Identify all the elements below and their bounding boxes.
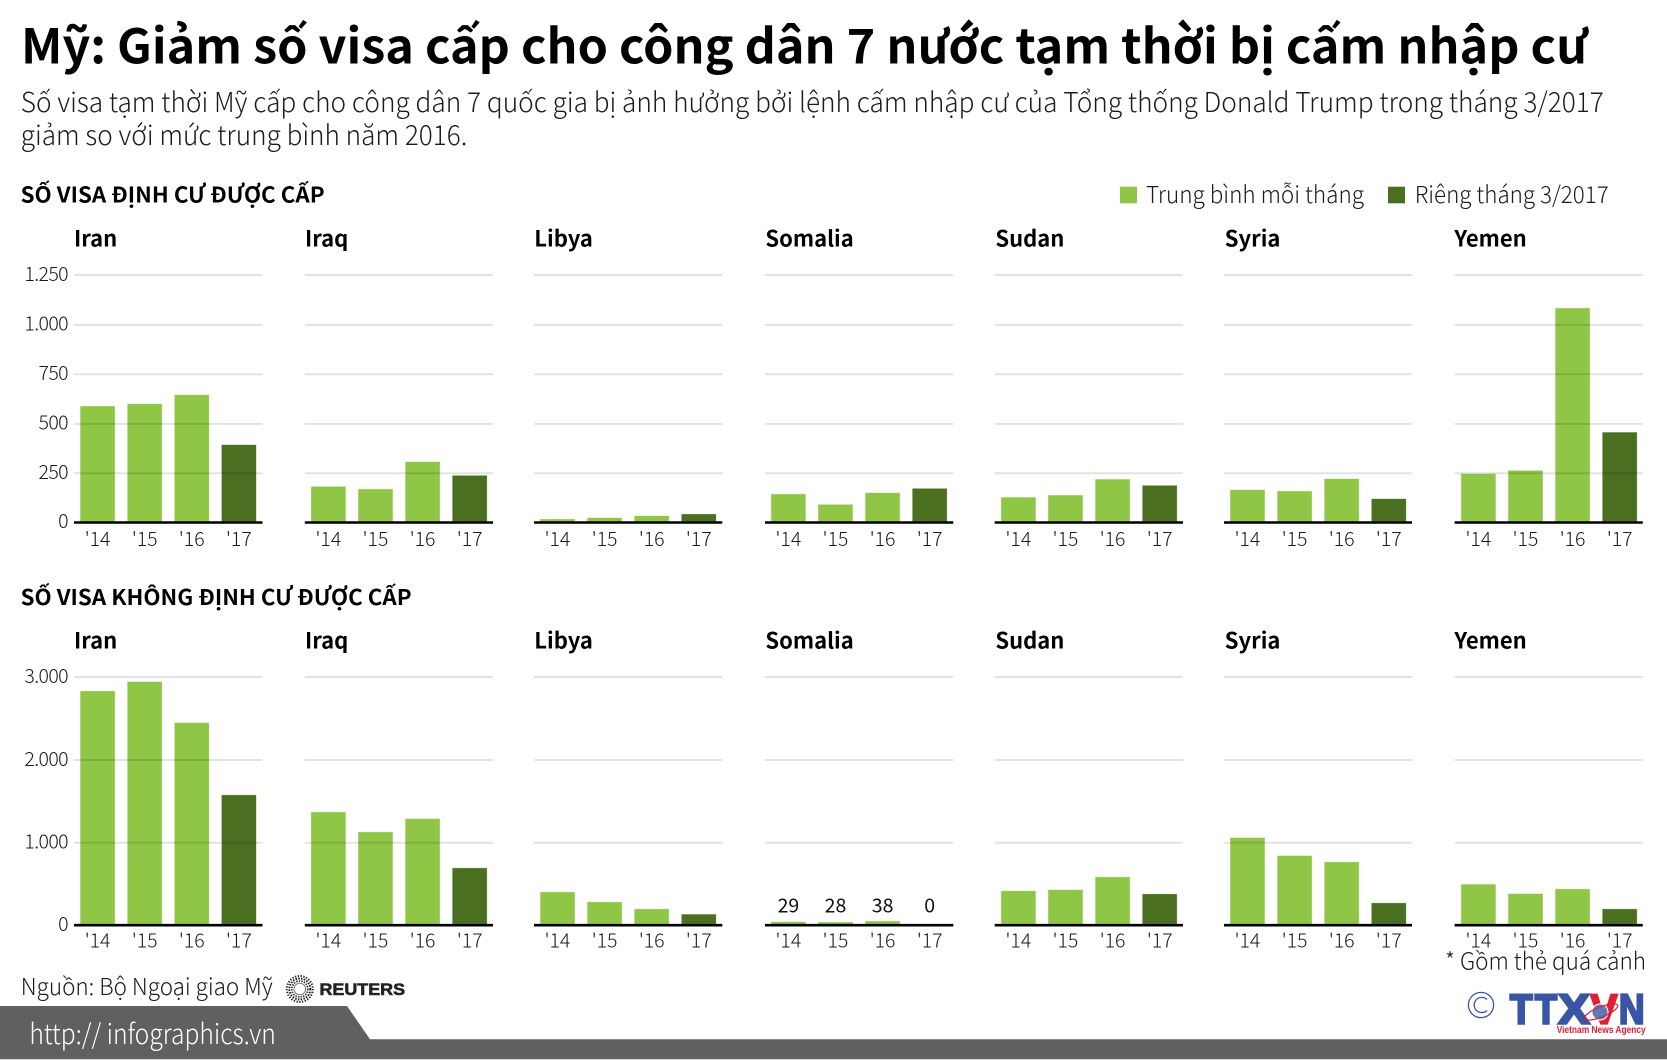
year labels: '15 bbox=[1513, 924, 1538, 954]
bars bbox=[1001, 877, 1177, 924]
logo: TTXVN: N bbox=[1619, 986, 1644, 1033]
year labels: '16 bbox=[179, 523, 205, 552]
y axis labels: 750 bbox=[38, 357, 68, 386]
chart: non-immigrant visas, Libya bbox=[534, 624, 722, 954]
country label: Iraq bbox=[305, 624, 348, 656]
bars bbox=[1230, 479, 1406, 521]
value labels: 29 bbox=[778, 889, 799, 918]
year labels: '17 bbox=[1376, 924, 1402, 954]
bars bbox=[1461, 308, 1637, 521]
year labels: '14 bbox=[85, 924, 110, 954]
bars bbox=[540, 514, 716, 521]
chart: immigrant visas, Libya bbox=[534, 222, 722, 552]
subtitle: Số visa tạm thời Mỹ cấp cho công dân 7 quốc gia bị ảnh hưởng bởi lệnh cấm nhập cư của Tổng thống Donald Trump trong tháng 3/2017 bbox=[21, 80, 1604, 120]
source: Nguồn: Bộ Ngoại giao Mỹ bbox=[21, 968, 273, 1002]
year labels bbox=[776, 523, 943, 552]
year labels bbox=[85, 924, 252, 954]
year labels bbox=[1466, 523, 1633, 552]
y axis labels: 1.250 bbox=[24, 258, 68, 287]
year labels bbox=[1235, 924, 1402, 954]
country label: Sudan bbox=[995, 624, 1064, 656]
icon: Reuters logo: REUTERS bbox=[320, 980, 405, 999]
year labels bbox=[545, 523, 712, 552]
year labels: '16 bbox=[1329, 523, 1355, 552]
title: Mỹ: Giảm số visa cấp cho công dân 7 nước tạm thời bị cấm nhập cư bbox=[21, 8, 1589, 78]
year labels: '16 bbox=[870, 523, 895, 552]
year labels bbox=[545, 924, 712, 954]
value labels: 28 bbox=[825, 889, 846, 918]
year labels: '16 bbox=[870, 924, 895, 954]
logo: TTXVN: V bbox=[1590, 986, 1618, 1033]
year labels: '16 bbox=[1329, 924, 1355, 954]
year labels: '15 bbox=[363, 523, 388, 552]
y axis labels: 0 bbox=[58, 505, 68, 534]
year labels: '14 bbox=[776, 523, 801, 552]
year labels: '15 bbox=[132, 523, 158, 552]
logo: TTXVN: X bbox=[1558, 986, 1590, 1033]
country label: Libya bbox=[534, 222, 593, 254]
bars bbox=[80, 395, 256, 521]
chart: non-immigrant visas, Syria bbox=[1224, 624, 1412, 954]
year labels: '16 bbox=[410, 924, 435, 954]
chart: non-immigrant visas, Iraq bbox=[305, 624, 493, 954]
y axis labels bbox=[24, 258, 68, 534]
chart: immigrant visas, Yemen bbox=[1453, 222, 1643, 552]
chart: immigrant visas, Somalia bbox=[765, 222, 953, 552]
value labels: 0 bbox=[924, 889, 935, 918]
year labels: '17 bbox=[226, 523, 252, 552]
value labels: 38 bbox=[872, 889, 893, 918]
year labels: '14 bbox=[1006, 523, 1031, 552]
y axis labels: 1.000 bbox=[24, 308, 68, 337]
year labels: '14 bbox=[316, 924, 341, 954]
country label: Iran bbox=[74, 624, 117, 656]
year labels: '16 bbox=[1100, 523, 1125, 552]
icon: copyright bbox=[1468, 992, 1494, 1018]
chart: non-immigrant visas, Somalia bbox=[765, 624, 953, 954]
legend bbox=[1120, 176, 1609, 210]
bars bbox=[311, 812, 487, 924]
year labels bbox=[85, 523, 252, 552]
chart: non-immigrant visas, Sudan bbox=[995, 624, 1183, 954]
country label: Yemen bbox=[1453, 222, 1527, 254]
chart: immigrant visas, Syria bbox=[1224, 222, 1412, 552]
bars bbox=[311, 462, 487, 521]
chart: immigrant visas, Sudan bbox=[995, 222, 1183, 552]
year labels: '17 bbox=[686, 924, 712, 954]
subtitle: giảm so với mức trung bình năm 2016. bbox=[21, 113, 467, 153]
year labels: '14 bbox=[1466, 924, 1491, 954]
bars bbox=[540, 892, 716, 924]
logo: TTXVN: Vietnam News Agency bbox=[1557, 1024, 1646, 1036]
country label: Syria bbox=[1225, 222, 1280, 254]
chart: non-immigrant visas, Iran bbox=[24, 624, 262, 954]
country label: Syria bbox=[1225, 624, 1280, 656]
bars bbox=[1461, 884, 1637, 924]
y axis labels: 250 bbox=[38, 456, 68, 485]
footer band bbox=[0, 1006, 1667, 1059]
bars bbox=[771, 489, 947, 521]
year labels: '16 bbox=[1100, 924, 1125, 954]
y axis labels bbox=[24, 660, 68, 937]
country label: Somalia bbox=[765, 624, 854, 656]
country label: Iraq bbox=[305, 222, 348, 254]
country label: Sudan bbox=[995, 222, 1064, 254]
year labels bbox=[316, 523, 483, 552]
year labels bbox=[1235, 523, 1402, 552]
year labels: '15 bbox=[592, 924, 617, 954]
year labels: '14 bbox=[1466, 523, 1491, 552]
y axis labels: 1.000 bbox=[24, 826, 68, 855]
year labels: '15 bbox=[363, 924, 388, 954]
year labels: '14 bbox=[1006, 924, 1031, 954]
logo: TTXVN: T bbox=[1535, 986, 1557, 1033]
chart: immigrant visas, Iraq bbox=[305, 222, 493, 552]
year labels bbox=[1006, 924, 1173, 954]
year labels: '15 bbox=[1053, 523, 1078, 552]
section heading: immigrant visas: SỐ VISA ĐỊNH CƯ ĐƯỢC CẤP bbox=[21, 179, 325, 210]
year labels: '15 bbox=[1282, 523, 1307, 552]
year labels: '16 bbox=[1560, 924, 1585, 954]
year labels: '17 bbox=[1607, 523, 1633, 552]
year labels: '15 bbox=[132, 924, 158, 954]
legend item: March 2017: Riêng tháng 3/2017 bbox=[1415, 176, 1609, 210]
year labels: '14 bbox=[1235, 523, 1260, 552]
subtitle bbox=[21, 80, 1604, 153]
year labels: '17 bbox=[226, 924, 252, 954]
year labels bbox=[1466, 924, 1633, 954]
year labels: '17 bbox=[917, 924, 943, 954]
year labels: '14 bbox=[85, 523, 110, 552]
logo: TTXVN bbox=[1510, 986, 1646, 1036]
year labels bbox=[776, 924, 943, 954]
logo: TTXVN: T bbox=[1510, 986, 1533, 1033]
section heading: non-immigrant visas: SỐ VISA KHÔNG ĐỊNH CƯ ĐƯỢC CẤP bbox=[21, 581, 412, 612]
year labels bbox=[316, 924, 483, 954]
country label: Libya bbox=[534, 624, 593, 656]
legend item: monthly average: Trung bình mỗi tháng bbox=[1146, 176, 1364, 210]
value labels bbox=[778, 889, 935, 918]
y axis labels: 0 bbox=[58, 908, 68, 937]
year labels: '16 bbox=[1560, 523, 1585, 552]
bars bbox=[80, 682, 256, 924]
chart: immigrant visas, Iran bbox=[24, 222, 262, 552]
year labels: '17 bbox=[917, 523, 943, 552]
icon: Reuters logo bbox=[287, 976, 405, 1002]
year labels: '14 bbox=[545, 924, 570, 954]
year labels: '15 bbox=[1513, 523, 1538, 552]
year labels: '17 bbox=[686, 523, 712, 552]
year labels: '17 bbox=[1607, 924, 1633, 954]
year labels: '16 bbox=[410, 523, 435, 552]
y axis labels: 500 bbox=[38, 407, 68, 436]
country label: Somalia bbox=[765, 222, 854, 254]
year labels: '17 bbox=[457, 924, 483, 954]
y axis labels: 2.000 bbox=[24, 743, 68, 772]
year labels: '17 bbox=[1147, 924, 1173, 954]
website url: http:// infographics.vn bbox=[29, 1013, 276, 1053]
y axis labels: 3.000 bbox=[24, 660, 68, 689]
year labels: '16 bbox=[639, 523, 665, 552]
bars bbox=[1230, 838, 1406, 924]
year labels: '17 bbox=[457, 523, 483, 552]
year labels: '15 bbox=[1053, 924, 1078, 954]
country label: Yemen bbox=[1453, 624, 1527, 656]
bars bbox=[1001, 480, 1177, 521]
year labels: '15 bbox=[1282, 924, 1307, 954]
year labels: '14 bbox=[545, 523, 570, 552]
year labels: '17 bbox=[1147, 523, 1173, 552]
year labels: '16 bbox=[639, 924, 665, 954]
year labels: '15 bbox=[592, 523, 617, 552]
year labels: '14 bbox=[1235, 924, 1260, 954]
year labels: '15 bbox=[823, 924, 848, 954]
country label: Iran bbox=[74, 222, 117, 254]
year labels bbox=[1006, 523, 1173, 552]
bars bbox=[771, 921, 900, 924]
footnote: * Gồm thẻ quá cảnh bbox=[1445, 943, 1646, 977]
year labels: '16 bbox=[179, 924, 205, 954]
year labels: '17 bbox=[1376, 523, 1402, 552]
year labels: '14 bbox=[776, 924, 801, 954]
year labels: '14 bbox=[316, 523, 341, 552]
chart: non-immigrant visas, Yemen bbox=[1453, 624, 1643, 954]
year labels: '15 bbox=[823, 523, 848, 552]
